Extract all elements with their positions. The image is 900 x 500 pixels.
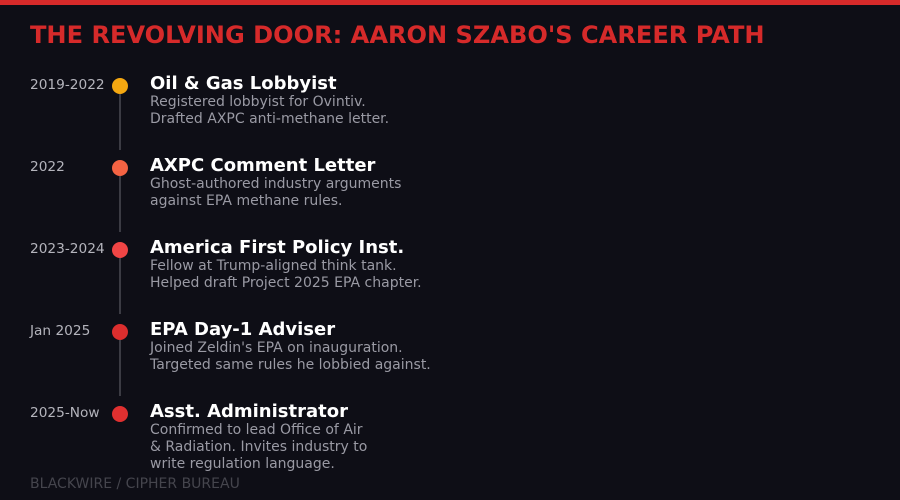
entry: 2019-2022: 2019-2022 — [30, 77, 105, 93]
entry: Jan 2025: Jan 2025 — [29, 323, 90, 339]
entry: 2019-2022: Drafted AXPC anti-methane letter. — [150, 111, 389, 127]
entry: 2023-2024: America First Policy Inst. — [150, 237, 404, 258]
entry: 2022: Ghost-authored industry arguments — [150, 176, 401, 192]
entry: 2025-Now — [30, 401, 367, 472]
entry: 2025-Now: write regulation language. — [150, 456, 335, 472]
entry: 2022 — [30, 155, 401, 209]
entry: 2022: 2022 — [30, 159, 65, 175]
entry: 2022: against EPA methane rules. — [150, 193, 342, 209]
entry: 2025-Now: 2025-Now — [30, 405, 100, 421]
entry: 2023-2024: 2023-2024 — [30, 241, 105, 257]
entry: 2022: AXPC Comment Letter — [150, 155, 376, 176]
entry: 2025-Now: Confirmed to lead Office of Air — [150, 422, 363, 438]
top accent bar — [0, 0, 900, 5]
entry: 2023-2024 — [30, 237, 422, 291]
entry: Jan 2025: EPA Day-1 Adviser — [150, 319, 335, 340]
entry: 2025-Now: Asst. Administrator — [150, 401, 348, 422]
timeline connector lines — [119, 94, 121, 396]
entry: 2023-2024: Fellow at Trump-aligned think tank. — [150, 258, 397, 274]
entry: 2019-2022: Registered lobbyist for Ovintiv. — [150, 94, 366, 110]
entry: Jan 2025: Targeted same rules he lobbied against. — [149, 357, 431, 373]
title: THE REVOLVING DOOR: AARON SZABO'S CAREER PATH — [30, 21, 765, 49]
footer credit: BLACKWIRE / CIPHER BUREAU — [30, 476, 240, 492]
entry: 2019-2022 — [30, 73, 389, 127]
entry: 2019-2022: Oil & Gas Lobbyist — [150, 73, 337, 94]
entry: Jan 2025 — [29, 319, 431, 373]
entry: Jan 2025: Joined Zeldin's EPA on inauguration. — [149, 340, 403, 356]
entry: 2023-2024: Helped draft Project 2025 EPA chapter. — [150, 275, 422, 291]
entry: 2025-Now: & Radiation. Invites industry to — [150, 439, 367, 455]
